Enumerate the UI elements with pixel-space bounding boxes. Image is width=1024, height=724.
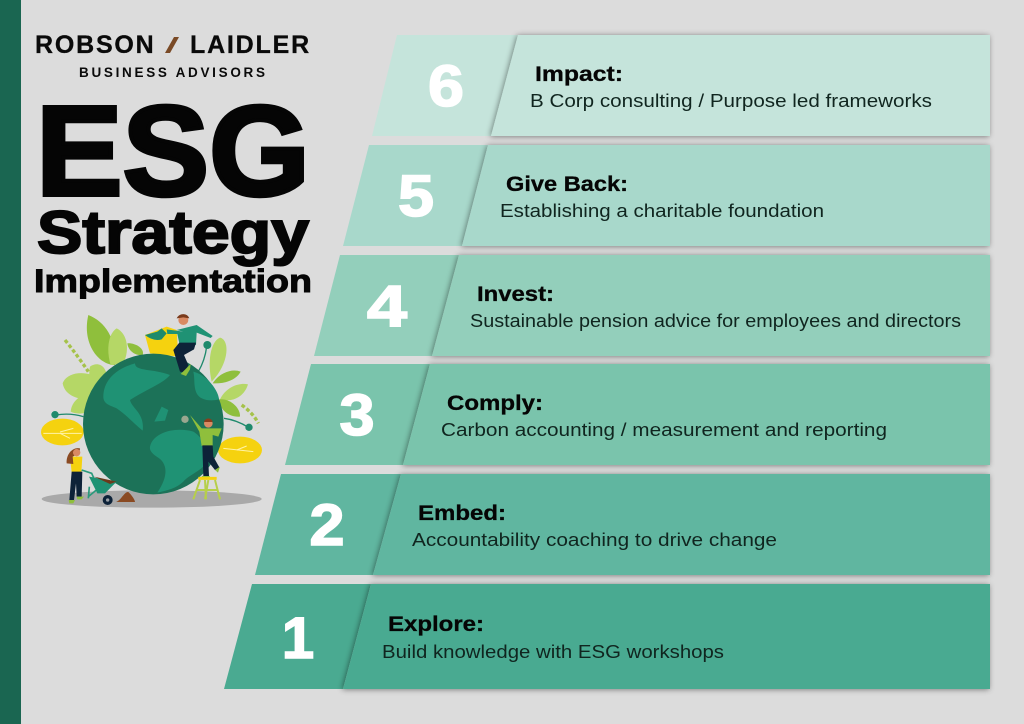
text 5: Establishing a charitable foundation	[500, 201, 824, 221]
number tab 1	[224, 584, 371, 689]
step ladder	[193, 478, 220, 499]
panel 3	[403, 364, 990, 465]
logo: Robson / Laidler Business Advisors: LAIDLER	[190, 31, 311, 59]
number tab 2: 2	[310, 493, 344, 558]
title: ESG Strategy Implementation: Strategy	[37, 199, 310, 266]
text 4	[470, 283, 961, 331]
step 1: Explore	[224, 584, 990, 689]
title: ESG Strategy Implementation: Implementation	[34, 263, 312, 299]
person watering globe	[145, 314, 213, 376]
text 3: Comply:	[447, 392, 543, 415]
step 2: Embed	[255, 474, 990, 575]
text 5	[500, 173, 824, 221]
title: ESG Strategy Implementation: ESG	[36, 80, 310, 223]
person cleaning globe	[181, 415, 222, 479]
left green bar	[0, 0, 21, 724]
title: ESG Strategy Implementation	[34, 80, 312, 299]
text 4: Sustainable pension advice for employees and directors	[470, 311, 961, 331]
illustration: people tending a green globe	[41, 314, 262, 508]
text 6: B Corp consulting / Purpose led frameworks	[530, 91, 932, 111]
panel 2	[373, 474, 990, 575]
logo: Robson / Laidler Business Advisors: ROBSON	[35, 31, 156, 59]
text 1: Explore:	[388, 613, 484, 636]
number tab 3	[285, 364, 430, 465]
globe	[83, 354, 224, 494]
number tab 5: 5	[398, 164, 434, 229]
number tab 6	[372, 35, 518, 136]
text 2: Embed:	[418, 502, 506, 525]
text 2: Accountability coaching to drive change	[412, 530, 777, 550]
step 4: Invest	[314, 255, 990, 356]
number tab 4	[314, 255, 459, 356]
logo: Robson / Laidler Business Advisors: BUSINESS ADVISORS	[79, 65, 265, 80]
text 3: Carbon accounting / measurement and reporting	[441, 420, 887, 440]
step 5: Give Back	[343, 145, 990, 246]
person with wheelbarrow	[67, 448, 135, 505]
step 6: Impact	[372, 35, 990, 136]
text 1	[382, 613, 724, 662]
number tab 4: 4	[367, 274, 407, 339]
text 5: Give Back:	[506, 173, 628, 196]
foliage	[41, 315, 262, 463]
logo: Robson / Laidler Business Advisors	[35, 31, 311, 80]
number tab 2	[255, 474, 401, 575]
text 1: Build knowledge with ESG workshops	[382, 642, 724, 662]
text 2	[412, 502, 777, 550]
number tab 1: 1	[282, 606, 314, 671]
text 6	[530, 63, 932, 111]
text 3	[441, 392, 887, 440]
text 4: Invest:	[477, 283, 554, 306]
panel 4	[432, 255, 990, 356]
panel 5	[462, 145, 990, 246]
text 6: Impact:	[535, 63, 623, 86]
panel 6	[491, 35, 990, 136]
ground shadow	[42, 490, 262, 508]
number tab 5	[343, 145, 488, 246]
number tab 6: 6	[428, 54, 464, 119]
step 3: Comply	[285, 364, 990, 465]
panel 1	[343, 584, 990, 689]
number tab 3: 3	[340, 383, 374, 448]
